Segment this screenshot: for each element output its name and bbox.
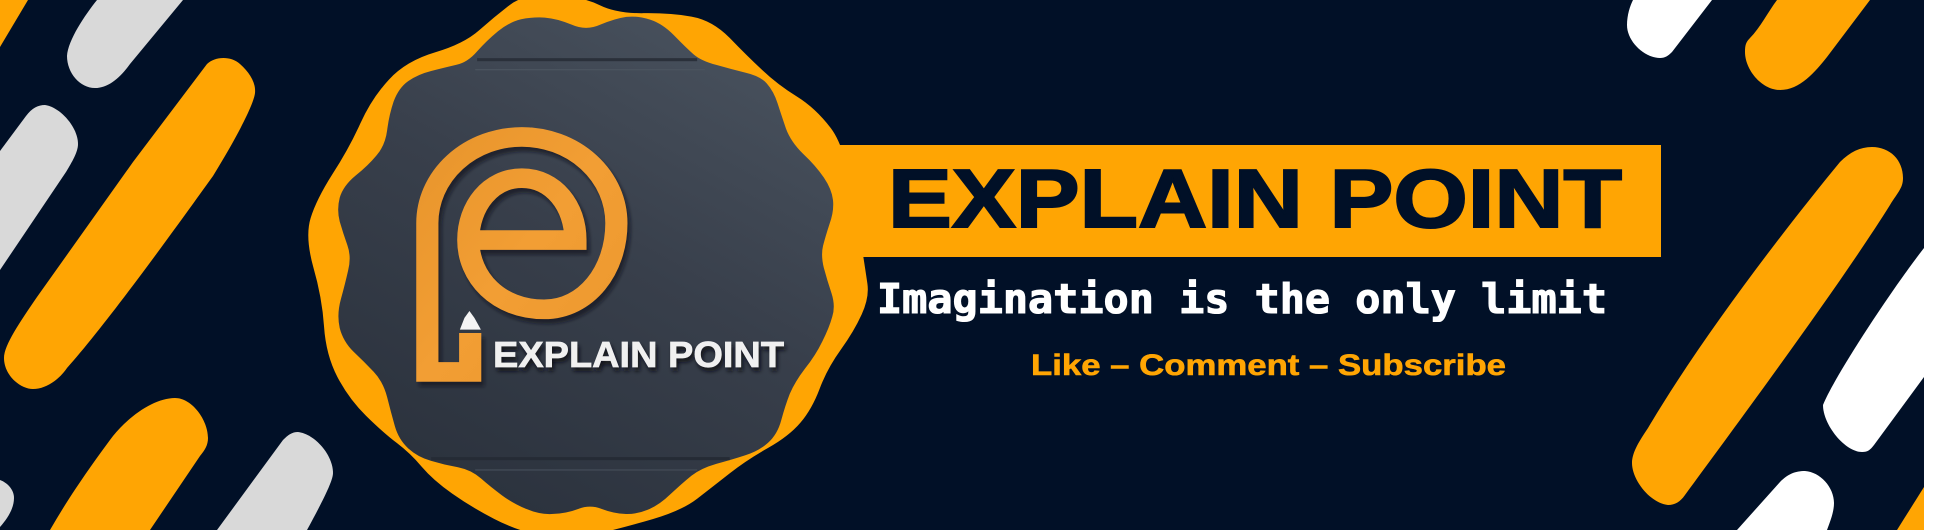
- logo text: EXPLAIN POINT: [493, 334, 784, 375]
- badge: orange wavy blob: [308, 0, 868, 530]
- tagline: Imagination is the only limit: [877, 275, 1607, 323]
- title: EXPLAIN POINT: [888, 152, 1622, 245]
- call to action: Like – Comment – Subscribe: [1031, 349, 1506, 382]
- icon: pencil tip: [460, 311, 481, 330]
- logo shadow: [430, 142, 619, 377]
- title bar: [840, 145, 1661, 257]
- right decorative stripes: [1627, 0, 1924, 530]
- logo: pe monogram: [427, 137, 616, 372]
- left decorative stripes: [0, 0, 333, 530]
- logo text shadow: EXPLAIN POINT: [495, 338, 786, 379]
- white right margin strip: [1924, 0, 1950, 530]
- badge: dark panel with logo: [338, 17, 834, 514]
- panel shape: [338, 17, 834, 514]
